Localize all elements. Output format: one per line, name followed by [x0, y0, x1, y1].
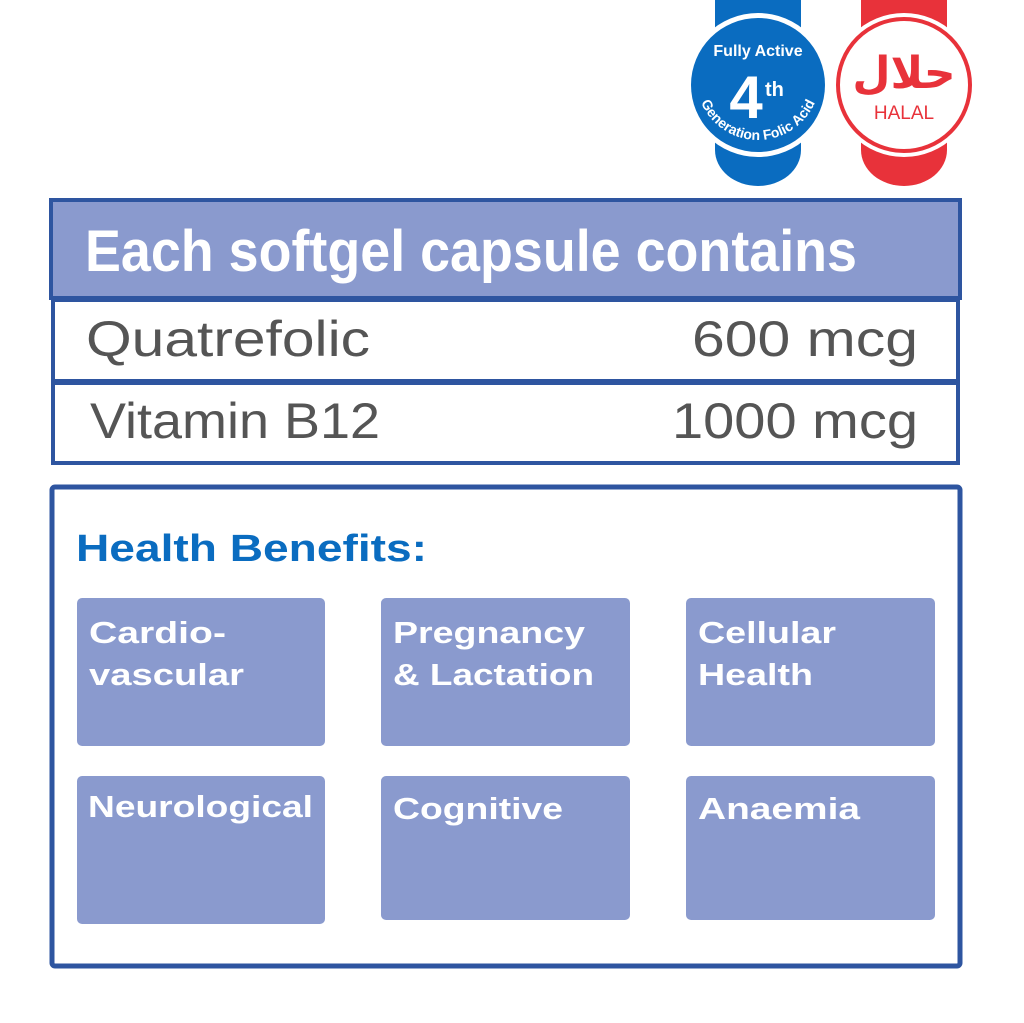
badge: halal: HALAL: [874, 103, 934, 124]
benefit: cognitive: Cognitive: [393, 791, 563, 826]
benefit: cellular health: Cellular: [698, 615, 836, 650]
benefit: cardiovascular: vascular: [89, 657, 244, 692]
badge: fully active 4th generation folic acid: th: [765, 79, 784, 101]
benefit: cellular health: [686, 598, 935, 746]
panel: health benefits: [52, 487, 960, 966]
benefit: neurological: [77, 776, 325, 924]
row: quatrefolic: Quatrefolic: [86, 311, 370, 367]
benefit: pregnancy & lactation: [381, 598, 630, 746]
row: vitamin b12: Vitamin B12: [90, 393, 380, 449]
row: quatrefolic: 600 mcg: [692, 311, 918, 367]
badge: fully active 4th generation folic acid: [691, 0, 825, 186]
row: quatrefolic: [53, 300, 958, 381]
badge: halal: حلال: [852, 48, 956, 99]
badge: fully active 4th generation folic acid: Generation Folic Acid: [702, 98, 815, 140]
heading: health benefits: Health Benefits:: [76, 528, 427, 570]
table header: Each softgel capsule contains: [85, 219, 857, 284]
benefit: cognitive: [381, 776, 630, 920]
benefit: cardiovascular: [77, 598, 325, 746]
benefit: cellular health: Health: [698, 657, 813, 692]
row: vitamin b12: [53, 383, 958, 463]
benefit: neurological: Neurological: [88, 789, 313, 824]
benefit: anaemia: [686, 776, 935, 920]
badge: fully active 4th generation folic acid: Fully Active: [713, 43, 803, 60]
badge: fully active 4th generation folic acid: 4: [729, 64, 763, 131]
benefit: anaemia: Anaemia: [698, 791, 861, 826]
table header: [51, 200, 960, 298]
badge: halal: [832, 0, 976, 186]
benefit: cardiovascular: Cardio-: [89, 615, 226, 650]
benefit: pregnancy & lactation: & Lactation: [393, 657, 594, 692]
benefit: pregnancy & lactation: Pregnancy: [393, 615, 586, 650]
panel: ingredients table: [51, 200, 960, 463]
row: vitamin b12: 1000 mcg: [672, 393, 918, 449]
